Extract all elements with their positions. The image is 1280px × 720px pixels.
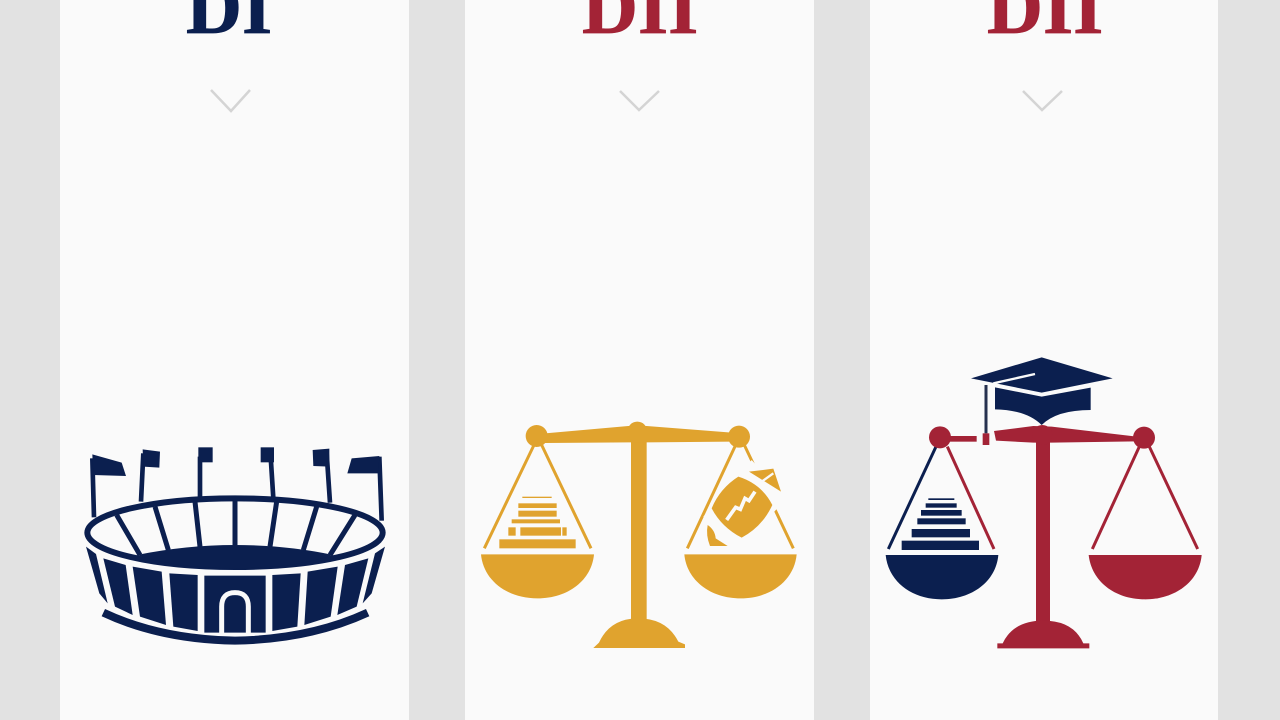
book stack — [902, 498, 979, 550]
scale base — [593, 618, 685, 648]
left pan — [886, 555, 998, 599]
graduation cap — [971, 357, 1113, 445]
chevron: DII — [620, 91, 659, 110]
flags — [92, 447, 379, 476]
stadium rim and spokes — [87, 498, 383, 567]
left pan navy string — [888, 447, 936, 549]
book stack — [499, 497, 576, 548]
chevron: DII — [1023, 91, 1062, 110]
scale post — [631, 433, 647, 623]
scale strings — [484, 445, 793, 548]
scale base — [997, 621, 1089, 648]
scale beam — [545, 426, 732, 443]
icon: stadium with flags — [86, 447, 385, 641]
panel: DI — [60, 0, 409, 720]
panel: DII tilted scale — [870, 0, 1218, 720]
panel: DII gold scale — [465, 0, 814, 720]
scale strings — [947, 447, 1198, 549]
icon: red balance scale with books and graduation cap — [886, 357, 1202, 648]
flag poles — [92, 453, 382, 521]
right pan — [684, 554, 797, 598]
stadium field — [137, 545, 333, 568]
stadium arch — [222, 593, 248, 633]
stadium base band — [103, 613, 368, 641]
scale beam — [929, 425, 1155, 449]
left pan — [481, 554, 594, 598]
football — [703, 460, 787, 547]
scale post — [1036, 435, 1050, 625]
stadium wall panels — [86, 547, 385, 633]
right pan — [1089, 555, 1202, 599]
chevron: DI — [211, 90, 250, 111]
icon: gold balance scale with books and football — [481, 422, 797, 648]
